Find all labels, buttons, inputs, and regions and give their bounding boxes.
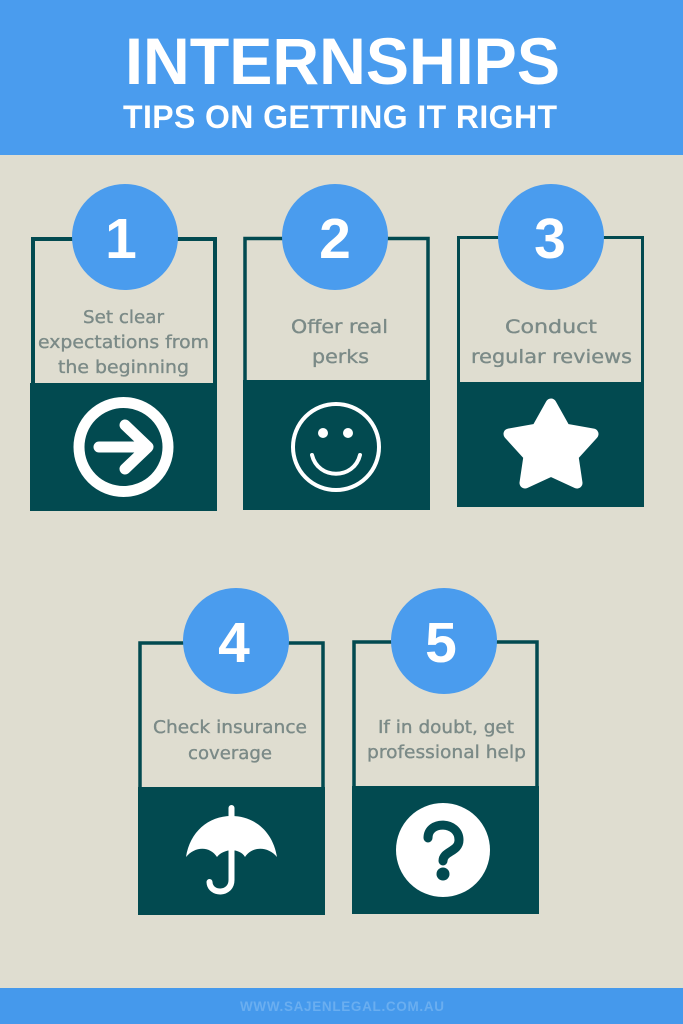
tip 3 text — [471, 316, 632, 368]
icon: smiley face — [293, 404, 379, 490]
footer banner — [0, 988, 683, 1024]
tip 1 text: Set clear — [83, 308, 165, 328]
panel: tip 2 — [243, 184, 430, 510]
tip 3 text: Conduct — [505, 316, 597, 338]
tip 5 text: professional help — [367, 743, 526, 763]
tip 1 text: the beginning — [58, 358, 189, 378]
icon: question mark — [396, 803, 490, 897]
number 3: 3 — [534, 207, 566, 271]
tip 1 text — [38, 308, 209, 378]
number 1: 1 — [105, 207, 137, 271]
icon: arrow in circle — [79, 402, 168, 492]
panel: tip 5 — [352, 588, 539, 914]
tip 5 text: If in doubt, get — [378, 718, 514, 738]
panel: tip 4 — [138, 588, 325, 915]
panel: tip 3 — [457, 184, 644, 507]
tip 2 text: Offer real — [291, 316, 388, 338]
website: WWW.SAJENLEGAL.COM.AU — [240, 999, 444, 1014]
tip 1 text: expectations from — [38, 333, 209, 353]
tip 4 text: coverage — [188, 744, 272, 764]
tip 3 text: regular reviews — [471, 346, 632, 368]
number 4: 4 — [218, 611, 250, 675]
tip 5 text — [367, 718, 526, 763]
panel: tip 1 — [30, 184, 217, 511]
number 5: 5 — [425, 611, 457, 675]
icon: star — [509, 404, 593, 483]
tip 4 text: Check insurance — [153, 718, 307, 738]
icon: umbrella — [186, 808, 277, 892]
tip 2 text: perks — [312, 346, 369, 368]
tip 2 text — [291, 316, 388, 368]
subtitle: TIPS ON GETTING IT RIGHT — [123, 99, 557, 135]
title: INTERNSHIPS — [125, 24, 560, 98]
tip 4 text — [153, 718, 307, 764]
header banner — [0, 0, 683, 155]
number 2: 2 — [319, 207, 351, 271]
